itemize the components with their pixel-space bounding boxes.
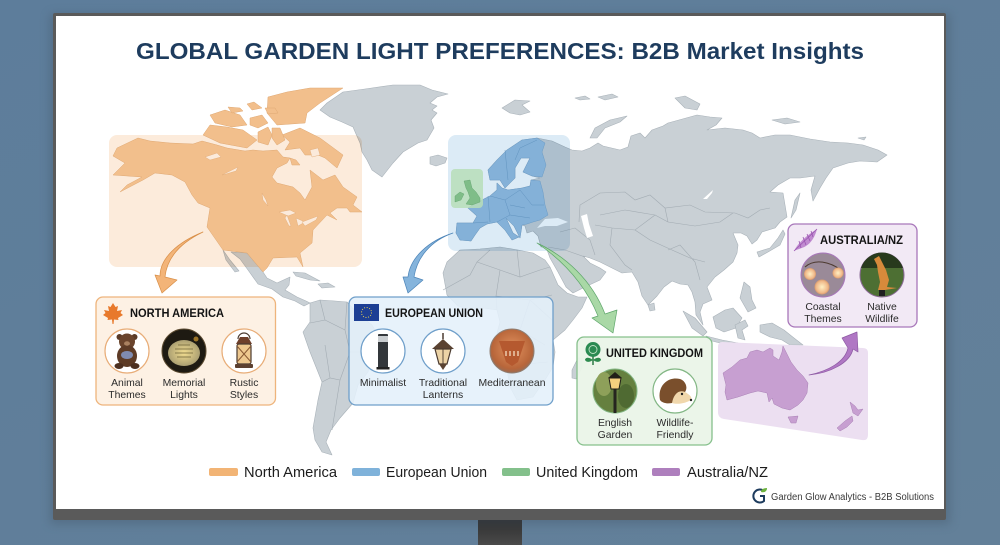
label: wildlife friendly: Friendly xyxy=(657,430,694,441)
icon: kangaroo xyxy=(860,253,904,297)
label: traditional lanterns xyxy=(419,378,467,401)
panel: United Kingdom xyxy=(577,337,712,445)
icon: mediterranean terracotta light xyxy=(490,329,534,373)
heading: United Kingdom: UNITED KINGDOM xyxy=(606,348,703,360)
legend: United Kingdom xyxy=(536,464,638,481)
label: mediterranean: Mediterranean xyxy=(478,378,546,389)
icon: brand logo xyxy=(753,488,767,502)
icon: hedgehog xyxy=(653,369,697,413)
map: United Kingdom land xyxy=(455,180,480,205)
panel: European Union region highlight xyxy=(448,135,570,251)
heading: North America: NORTH AMERICA xyxy=(130,308,224,320)
label: coastal themes: Themes xyxy=(804,314,842,325)
panel: North America xyxy=(96,297,276,405)
panel: Australia/NZ xyxy=(788,224,917,327)
map: Great Lakes and large lakes xyxy=(205,148,320,226)
world map xyxy=(109,85,887,455)
icon: silver fern xyxy=(794,229,817,251)
label: memorial lights: Lights xyxy=(170,390,198,401)
label: native wildlife: Wildlife xyxy=(865,314,899,325)
heading: Australia/NZ: AUSTRALIA/NZ xyxy=(820,235,903,247)
label: english garden: Garden xyxy=(598,430,633,441)
label: coastal themes xyxy=(804,302,842,325)
icon: rose xyxy=(585,342,601,365)
legend xyxy=(209,464,768,481)
label: animal themes: Animal xyxy=(111,378,143,389)
map: European Union land xyxy=(456,138,548,241)
panel: Australia region highlight xyxy=(718,342,868,440)
map: country borders on grey land xyxy=(310,192,770,430)
label: minimalist: Minimalist xyxy=(360,378,406,389)
arrow: to Australia/NZ panel xyxy=(809,332,858,375)
label: rustic styles: Rustic xyxy=(230,378,258,389)
arrow: to North America panel xyxy=(155,232,203,293)
arrow: to United Kingdom panel xyxy=(537,243,617,333)
label: traditional lanterns: Lanterns xyxy=(423,390,463,401)
panel: European Union xyxy=(349,297,553,405)
monitor stand xyxy=(478,519,522,545)
label: rustic styles: Styles xyxy=(230,390,258,401)
map: North America land xyxy=(113,88,362,272)
panel: North America region highlight xyxy=(109,135,362,267)
map: EU borders xyxy=(473,140,544,223)
icon: animal themes bear xyxy=(105,329,149,373)
label: wildlife friendly xyxy=(657,418,694,441)
map: white inland seas xyxy=(537,190,713,238)
legend: European Union xyxy=(386,464,487,481)
label: native wildlife: Native xyxy=(867,302,897,313)
label: animal themes xyxy=(108,378,146,401)
footer text: Garden Glow Analytics - B2B Solutions xyxy=(771,492,934,503)
footer brand xyxy=(753,488,934,503)
legend: North America xyxy=(244,464,338,481)
icon: rustic lantern xyxy=(222,329,266,373)
label: memorial lights: Memorial xyxy=(163,378,205,389)
icon: memorial light stone xyxy=(162,329,206,373)
label: memorial lights xyxy=(163,378,205,401)
map: grey land masses xyxy=(223,85,887,455)
label: native wildlife xyxy=(865,302,899,325)
arrow: to European Union panel xyxy=(403,233,453,293)
label: english garden xyxy=(598,418,633,441)
label: coastal themes: Coastal xyxy=(805,302,841,313)
label: traditional lanterns: Traditional xyxy=(419,378,467,389)
label: english garden: English xyxy=(598,418,632,429)
panel: United Kingdom region highlight xyxy=(451,169,483,208)
heading: European Union: EUROPEAN UNION xyxy=(385,308,483,320)
label: rustic styles xyxy=(230,378,258,401)
map: Australia and New Zealand xyxy=(723,346,863,431)
label: wildlife friendly: Wildlife- xyxy=(657,418,693,429)
legend: Australia/NZ xyxy=(687,464,768,481)
label: animal themes: Themes xyxy=(108,390,146,401)
icon: minimalist bollard light xyxy=(361,329,405,373)
title: GLOBAL GARDEN LIGHT PREFERENCES: B2B Market Insights xyxy=(136,38,864,64)
icon: maple leaf xyxy=(103,303,123,324)
icon: traditional lantern xyxy=(421,329,465,373)
icon: EU flag xyxy=(354,304,379,321)
icon: coastal string lights xyxy=(801,253,845,297)
icon: english garden lamp xyxy=(593,369,637,413)
